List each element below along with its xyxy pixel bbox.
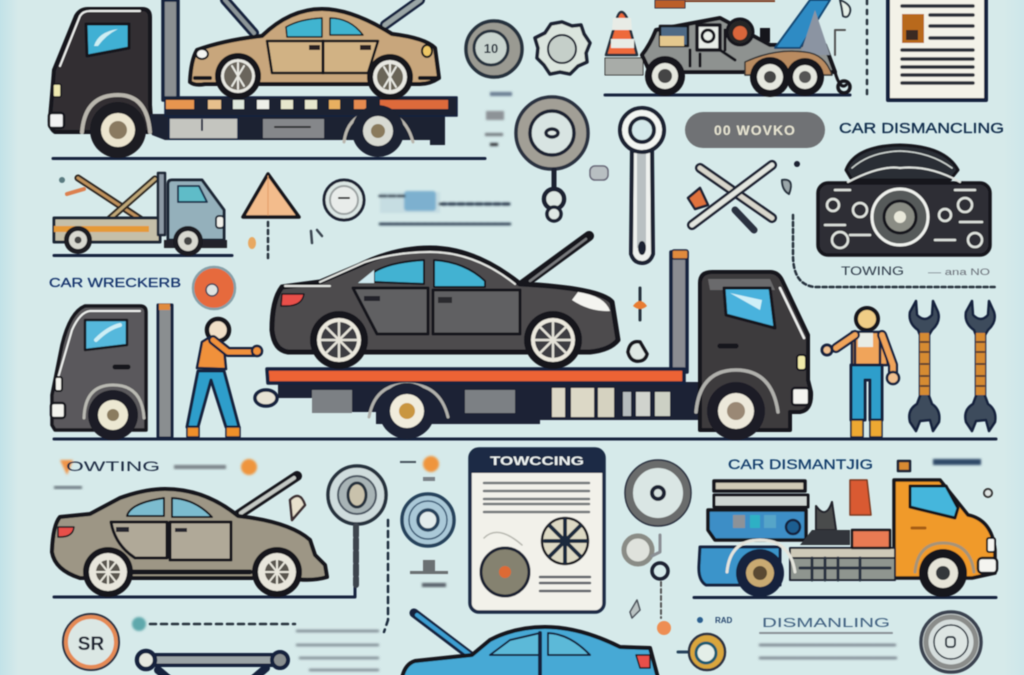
speed limit sign: SR	[78, 634, 104, 655]
worker right	[822, 308, 899, 437]
dashed connector with towing caption: — ana NO	[928, 267, 990, 277]
pill label	[685, 112, 825, 148]
heading car dismancling: CAR DISMANCLING	[839, 120, 1004, 137]
cab	[50, 9, 152, 132]
car jack	[137, 651, 288, 675]
worker left	[187, 319, 262, 437]
hook pendant	[624, 535, 671, 635]
crossed tools icon	[688, 161, 800, 230]
pill label: 00 WOVKO	[714, 122, 796, 138]
document panel towing: TOWCCING	[490, 454, 584, 468]
gear icon	[535, 22, 590, 74]
warning triangle	[243, 174, 299, 258]
blue car	[402, 613, 658, 675]
pillar	[671, 252, 687, 372]
faint text fragment	[380, 191, 510, 224]
bottom row caption	[697, 615, 896, 658]
gold badge	[678, 634, 725, 670]
disc pendant icon	[516, 97, 608, 221]
fenders	[696, 370, 778, 412]
dashed divider	[866, 0, 868, 100]
wrench pair	[909, 301, 995, 431]
tan car on top truck	[190, 0, 439, 100]
document top right	[888, 0, 986, 100]
chassis	[278, 382, 700, 424]
heading towing	[54, 458, 257, 489]
wheel icon bottom right	[921, 612, 981, 672]
gauge icon: 10	[484, 41, 498, 56]
bottom row caption: RAD	[715, 616, 733, 625]
orange bed	[267, 369, 684, 383]
dashed connector with towing caption	[793, 215, 996, 287]
faint caption lines	[297, 631, 378, 670]
bottom row caption: DISMANLING	[762, 615, 890, 630]
dashed connector with towing caption: TOWING	[841, 264, 904, 278]
heading towing: OWTING	[66, 458, 160, 474]
tool pendants	[628, 288, 647, 361]
tire icon	[625, 460, 691, 526]
ground lines	[53, 95, 996, 598]
deck	[165, 97, 457, 116]
heading car wreckers: CAR WRECKERB	[49, 275, 181, 290]
red dial icon	[193, 267, 235, 309]
engine diagram	[818, 145, 990, 255]
document panel towing	[470, 449, 604, 612]
main dark car	[272, 236, 618, 369]
mini glyphs column	[485, 92, 512, 146]
orange marker and globe dial	[400, 456, 454, 587]
cab	[700, 272, 811, 430]
circular dial icon	[311, 180, 364, 243]
fender and wheels	[82, 95, 150, 132]
top flatbed tow truck	[49, 0, 457, 158]
small wrecker tow truck	[54, 173, 227, 256]
wrecker tow with cone	[605, 0, 850, 97]
wheels	[707, 382, 765, 440]
chassis	[150, 114, 445, 145]
main flatbed tow truck	[255, 250, 811, 440]
speed limit sign	[63, 614, 119, 670]
left truck cab	[51, 304, 172, 440]
dashed connector bottom	[132, 520, 388, 632]
damaged sedan	[52, 476, 327, 597]
gauge icon	[466, 21, 522, 77]
heading car dismantling: CAR DISMANTJIG	[728, 456, 873, 472]
magnifier gauge	[328, 466, 386, 585]
orange tow truck	[699, 459, 997, 597]
wrench icon	[620, 108, 664, 263]
